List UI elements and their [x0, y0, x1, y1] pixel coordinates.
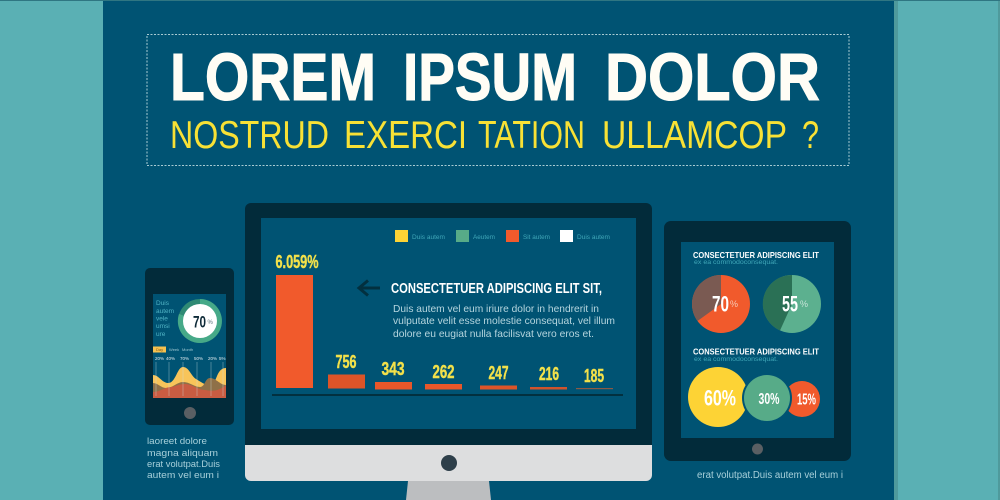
title	[170, 40, 820, 115]
phone percent labels: 5%	[219, 356, 226, 361]
phone	[145, 268, 234, 481]
phone donut: 70	[193, 312, 206, 332]
phone button	[184, 407, 196, 419]
phone side text: umsi	[156, 323, 170, 330]
phone tabs: Month	[182, 347, 193, 352]
monitor paragraph: dolore eu eugiat nulla facilisvat vero eros et.	[393, 328, 594, 340]
phone donut: %	[208, 320, 214, 326]
pie chart 55%	[763, 275, 821, 333]
monitor camera button	[441, 455, 457, 471]
pie chart 55%: 55	[782, 292, 798, 316]
phone caption: autem vel eum i	[147, 470, 219, 481]
phone tabs: Day	[156, 347, 163, 352]
phone side text: autem	[156, 308, 174, 315]
monitor stand	[406, 481, 491, 500]
subtitle: EXERCI	[344, 114, 467, 157]
bubble 30%	[742, 373, 792, 423]
pie chart 70%: 70	[712, 292, 729, 316]
tablet caption: erat volutpat.Duis autem vel eum i	[697, 470, 843, 481]
monitor paragraph: Duis autem vel eum iriure dolor in hendrerit in	[393, 303, 599, 315]
phone percent labels: 40%	[166, 356, 175, 361]
tablet button	[752, 444, 763, 454]
monitor screen	[261, 218, 636, 429]
phone body	[145, 268, 234, 425]
legend: Duis autem	[577, 235, 610, 241]
pie chart 70%	[692, 275, 750, 333]
monitor paragraph: vulputate velit esse molestie consequat, vel illum	[393, 315, 615, 327]
title: LOREM	[170, 40, 376, 115]
phone caption	[147, 436, 220, 481]
bar chart: 756	[336, 352, 356, 372]
monitor paragraph	[393, 303, 615, 340]
pie chart 70%: %	[730, 299, 738, 309]
monitor heading: CONSECTETUER ADIPISCING ELIT SIT,	[391, 281, 602, 297]
legend: Duis autem	[412, 235, 445, 241]
tablet	[664, 221, 851, 481]
bubble 60%: 60%	[704, 386, 736, 410]
phone screen	[153, 294, 226, 398]
tablet subheading 2: ex ea commodoconsequat.	[694, 357, 778, 363]
title box	[147, 34, 849, 166]
phone percent labels: 70%	[180, 356, 189, 361]
tablet heading 1: CONSECTETUER ADIPISCING ELIT	[693, 250, 820, 260]
bar chart: 262	[432, 362, 454, 382]
monitor	[245, 203, 652, 500]
monitor frame	[245, 203, 652, 445]
tablet heading 2: CONSECTETUER ADIPISCING ELIT	[693, 346, 820, 356]
phone area chart	[153, 362, 226, 398]
bubble 30%: 30%	[758, 391, 780, 408]
phone side text: ure	[156, 331, 166, 338]
phone side text: vele	[156, 316, 168, 322]
phone side text: Duis	[156, 300, 170, 307]
bar chart: 185	[584, 366, 604, 386]
phone tabs: Week	[169, 347, 179, 352]
bubble 15%	[784, 381, 820, 417]
phone donut	[178, 299, 222, 343]
bubble 60%	[688, 367, 748, 427]
phone caption: laoreet dolore	[147, 436, 207, 447]
bar chart: 6.059%	[276, 252, 318, 272]
tablet subheading 1: ex ea commodoconsequat.	[694, 260, 778, 266]
subtitle	[170, 114, 819, 157]
pie chart 55%: %	[800, 299, 808, 309]
arrow	[359, 280, 380, 296]
bubble 15%: 15%	[797, 392, 816, 408]
phone percent labels	[155, 356, 226, 361]
phone caption: magna aliquam	[147, 448, 218, 459]
subtitle: ULLAMCOP	[602, 114, 787, 157]
legend: Aeutem	[473, 235, 495, 241]
phone tabs	[153, 346, 193, 352]
phone percent labels: 20%	[155, 356, 164, 361]
bar chart: 247	[488, 363, 508, 383]
phone percent labels: 20%	[208, 356, 217, 361]
bar chart: 343	[382, 359, 404, 379]
bar chart	[272, 252, 623, 396]
title: IPSUM	[403, 40, 577, 115]
legend: Sit autem	[523, 235, 550, 241]
phone caption: erat volutpat.Duis	[147, 459, 220, 470]
bar chart: 216	[539, 364, 559, 384]
phone side text	[156, 300, 174, 338]
subtitle: NOSTRUD	[170, 114, 329, 157]
title: DOLOR	[605, 40, 820, 115]
monitor base	[245, 445, 652, 481]
tablet screen	[681, 242, 834, 438]
legend	[395, 230, 610, 242]
subtitle: TATION	[478, 114, 585, 157]
subtitle: ?	[802, 114, 819, 157]
tablet body	[664, 221, 851, 461]
phone percent labels: 50%	[194, 356, 203, 361]
